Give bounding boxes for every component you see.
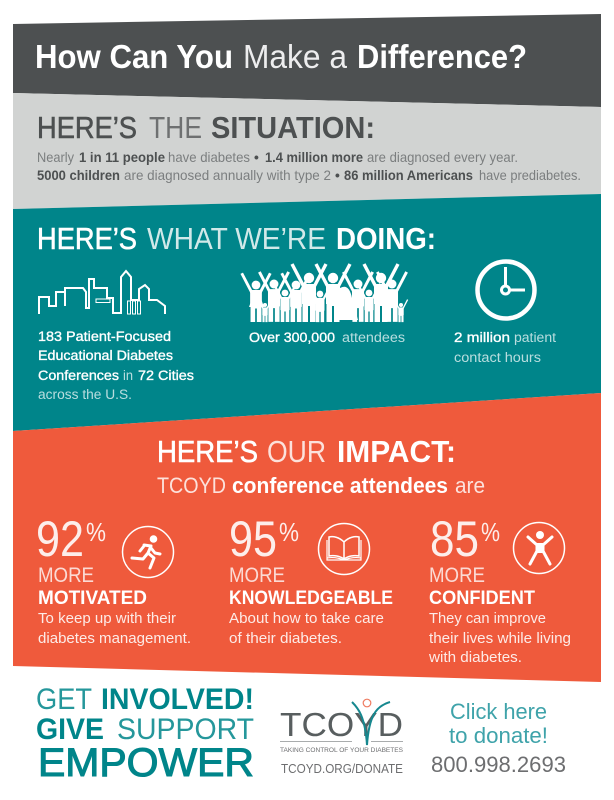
stat: 85% more confident: 85: [430, 511, 479, 567]
heading: here's what we're doing: [37, 221, 436, 256]
text block: contact hours: 2 million: [454, 330, 510, 346]
stat: 92% more motivated: 92: [36, 511, 84, 567]
subheading: conference attendees: TCOYD: [157, 473, 226, 498]
text: give support: GIVE: [36, 713, 104, 746]
text block: situation statistics: 86 million Americans: [344, 168, 473, 183]
stat: 85% more confident: %: [481, 517, 500, 547]
text: click here to donate: to donate!: [449, 723, 548, 748]
icon: crowd of people: [242, 264, 408, 322]
icon: clock: [478, 262, 534, 318]
text: phone number: 800.998.2693: [431, 752, 566, 777]
text: donate url: TCOYD.ORG/DONATE: [281, 762, 403, 776]
stat: 95% more knowledgeable: [229, 511, 393, 647]
stat: 95% more knowledgeable: About how to take care: [229, 611, 384, 627]
subheading: conference attendees: [157, 473, 485, 498]
panel: call to action: [36, 683, 254, 785]
heading: here's what we're doing: HERE’S: [37, 221, 137, 256]
title: Make a: [243, 38, 348, 75]
stat: 95% more knowledgeable: 95: [229, 511, 277, 567]
heading: here's what we're doing: WHAT WE’RE: [147, 221, 326, 256]
panel: title band: [13, 14, 601, 107]
heading: here's the situation: THE: [149, 110, 202, 145]
text block: situation statistics: are diagnosed annually with type 2: [124, 168, 331, 183]
stat: 85% more confident: MORE: [429, 563, 485, 587]
text block: situation statistics: •: [254, 150, 259, 165]
stat: 85% more confident: CONFIDENT: [429, 588, 535, 609]
text block: situation statistics: 1.4 million more: [265, 150, 363, 165]
panel: what we're doing: [13, 194, 601, 431]
stat: 92% more motivated: [36, 511, 191, 647]
text: empower: EMPOWER: [38, 741, 254, 785]
text block: situation statistics: are diagnosed every year.: [367, 150, 518, 165]
stat: 85% more confident: their lives while living: [429, 631, 571, 647]
text: get involved: GET: [36, 683, 92, 716]
title: Difference?: [357, 38, 527, 75]
text block: attendees: attendees: [342, 330, 405, 346]
text: click here to donate: [449, 699, 548, 748]
text block: conferences: 183 Patient-Focused: [38, 329, 171, 345]
heading: here's the situation: [37, 110, 375, 145]
text block: conferences: in: [123, 368, 133, 384]
heading: here's the situation: HERE’S: [37, 110, 137, 145]
text: give support: [36, 713, 254, 746]
stat: 92% more motivated: %: [86, 517, 106, 547]
text block: conferences: across the U.S.: [38, 387, 132, 403]
text: get involved: INVOLVED!: [101, 683, 254, 716]
text block: contact hours: [454, 330, 556, 366]
stat: 95% more knowledgeable: %: [279, 517, 299, 547]
title: [35, 38, 527, 75]
heading: here's our impact: HERE’S: [157, 434, 258, 469]
text block: attendees: Over 300,000: [249, 330, 335, 346]
text block: conferences: Conferences: [38, 368, 119, 384]
text block: conferences: [38, 329, 194, 403]
icon: person with raised arms: [514, 522, 564, 574]
text block: attendees: [249, 330, 405, 346]
stat: 92% more motivated: To keep up with their: [38, 611, 176, 627]
icon: open book: [318, 524, 370, 574]
stat: 92% more motivated: MOTIVATED: [38, 588, 147, 609]
text block: situation statistics: •: [335, 168, 340, 183]
heading: here's our impact: OUR: [267, 434, 326, 469]
text block: contact hours: patient: [514, 330, 556, 346]
logo: TCOYD: TCOYD: [280, 706, 403, 743]
panel: our impact: [13, 393, 601, 682]
stat: 92% more motivated: diabetes management.: [38, 631, 191, 647]
logo: TCOYD: TAKING CONTROL OF YOUR DIABETES: [280, 748, 403, 754]
text block: situation statistics: have prediabetes.: [479, 168, 581, 183]
logo: TCOYD: [280, 699, 403, 754]
icon: city skyline: [39, 271, 165, 314]
icon: runner: [122, 526, 174, 578]
heading: here's what we're doing: DOING:: [336, 221, 436, 256]
text: click here to donate: Click here: [450, 699, 547, 724]
stat: 92% more motivated: MORE: [38, 563, 94, 587]
text block: situation statistics: 1 in 11 people: [79, 150, 165, 165]
text block: contact hours: contact hours: [454, 350, 541, 366]
heading: here's our impact: [157, 434, 456, 469]
text block: conferences: Educational Diabetes: [38, 348, 173, 364]
panel: the situation: [13, 93, 601, 209]
subheading: conference attendees: are: [455, 473, 485, 498]
stat: 95% more knowledgeable: MORE: [229, 563, 285, 587]
stat: 95% more knowledgeable: KNOWLEDGEABLE: [229, 588, 393, 609]
text block: conferences: 72 Cities: [138, 368, 194, 384]
text block: situation statistics: have diabetes: [168, 150, 250, 165]
text block: situation statistics: Nearly: [37, 150, 74, 165]
text block: situation statistics: [37, 150, 581, 183]
heading: here's the situation: SITUATION:: [211, 110, 375, 145]
text: get involved: [36, 683, 254, 716]
title: How Can You: [35, 38, 233, 75]
subheading: conference attendees: conference attendees: [232, 473, 448, 498]
heading: here's our impact: IMPACT:: [337, 434, 456, 469]
stat: 85% more confident: [428, 511, 571, 666]
stat: 95% more knowledgeable: of their diabetes.: [229, 631, 342, 647]
text: give support: SUPPORT: [117, 713, 254, 746]
text block: situation statistics: 5000 children: [37, 168, 120, 183]
stat: 85% more confident: with diabetes.: [428, 650, 522, 666]
stat: 85% more confident: They can improve: [429, 611, 546, 627]
